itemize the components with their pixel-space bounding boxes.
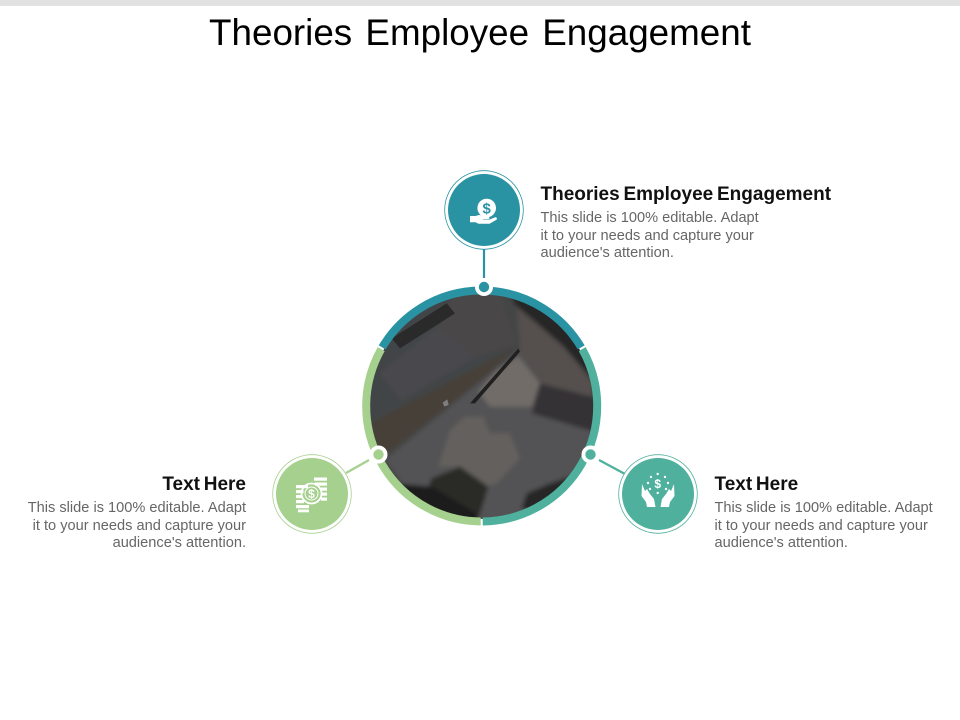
icon badge: open hands with dollar: $ <box>654 477 661 491</box>
text block: right: This slide is 100% editable. Adapt <box>714 500 933 516</box>
text block: left: it to your needs and capture your <box>33 518 246 534</box>
text block: right: Text Here <box>714 474 798 494</box>
node: left <box>370 446 388 464</box>
connector: right <box>599 460 625 474</box>
connector: top <box>483 249 485 278</box>
text block: left: This slide is 100% editable. Adapt <box>28 500 246 516</box>
text block: left <box>28 474 246 551</box>
text block: top <box>540 184 831 261</box>
ring segment: top <box>382 291 581 347</box>
text block: top: it to your needs and capture your <box>540 228 754 244</box>
node: right <box>582 446 600 464</box>
photo: hands writing on notebook beside laptop <box>370 294 594 519</box>
ring segment: right <box>483 349 597 522</box>
icon badge: hand holding coin: $ <box>483 200 492 218</box>
icon badge: coin stacks <box>273 455 351 533</box>
ring segment: left <box>366 349 481 522</box>
node: top <box>475 278 493 296</box>
text block: right: it to your needs and capture your <box>714 518 928 534</box>
text block: right <box>714 474 933 551</box>
icon badge: open hands with dollar <box>619 455 697 533</box>
icon badge: coin stacks: $ <box>308 487 315 501</box>
text block: left: audience's attention. <box>113 535 246 551</box>
text block: top: Theories Employee Engagement <box>540 184 831 204</box>
connector: left <box>346 460 369 473</box>
text block: left: Text Here <box>162 474 246 494</box>
central diagram <box>272 170 698 534</box>
title: Theories Employee Engagement <box>209 12 751 53</box>
text block: top: audience's attention. <box>540 245 674 261</box>
text block: right: audience's attention. <box>714 535 848 551</box>
icon badge: hand holding coin <box>445 171 523 249</box>
text block: top: This slide is 100% editable. Adapt <box>540 210 759 226</box>
